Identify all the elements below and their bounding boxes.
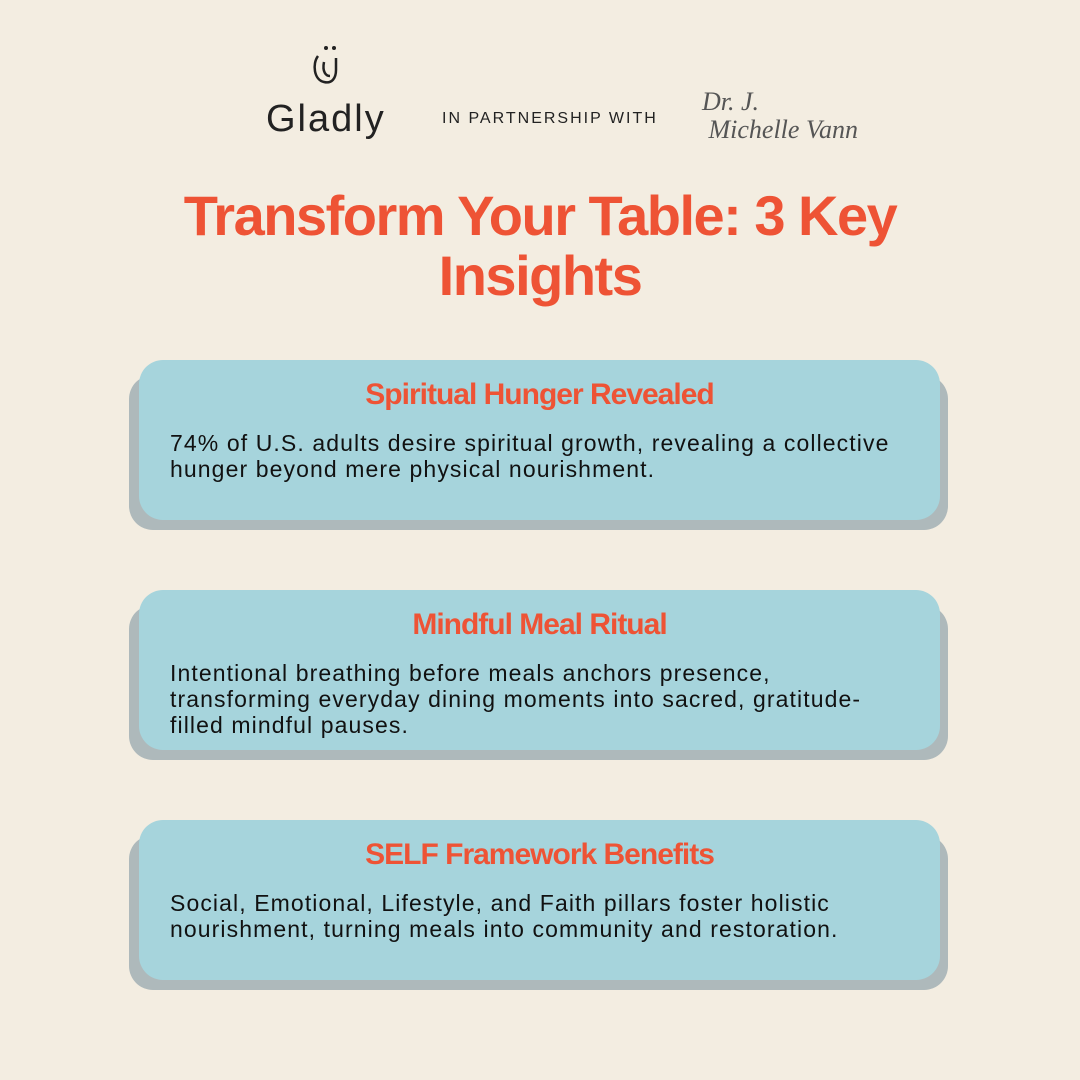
panel: mindful meal: filled mindful pauses. [170,712,409,738]
panel: mindful meal: Intentional breathing before meals anchors presence, [170,660,771,686]
partnership text: IN PARTNERSHIP WITH [442,110,658,127]
panel: spiritual hunger [129,360,948,530]
title: Transform Your Table: 3 Key Insights [184,184,896,307]
logo: Gladly [266,46,386,140]
panel: spiritual hunger: 74% of U.S. adults desire spiritual growth, revealing a collective [170,430,889,456]
panel: mindful meal: transforming everyday dining moments into sacred, gratitude- [170,686,861,712]
signature: Dr. J. Michelle Vann: Michelle Vann [708,115,858,144]
panel: SELF framework: SELF Framework Benefits [365,838,714,871]
panel: mindful meal [129,590,948,760]
panel: spiritual hunger: hunger beyond mere physical nourishment. [170,456,655,482]
panel: SELF framework: Social, Emotional, Lifestyle, and Faith pillars foster holistic [170,890,830,916]
panel: SELF framework [129,820,948,990]
signature: Dr. J. Michelle Vann [702,87,858,144]
panel: SELF framework: nourishment, turning meals into community and restoration. [170,916,838,942]
logo: Gladly: Gladly [266,98,386,140]
panel: spiritual hunger: Spiritual Hunger Revealed [365,378,714,411]
panel: mindful meal: Mindful Meal Ritual [412,608,667,641]
icon: gladly mark [313,46,338,84]
signature: Dr. J. Michelle Vann: Dr. J. [702,87,759,116]
